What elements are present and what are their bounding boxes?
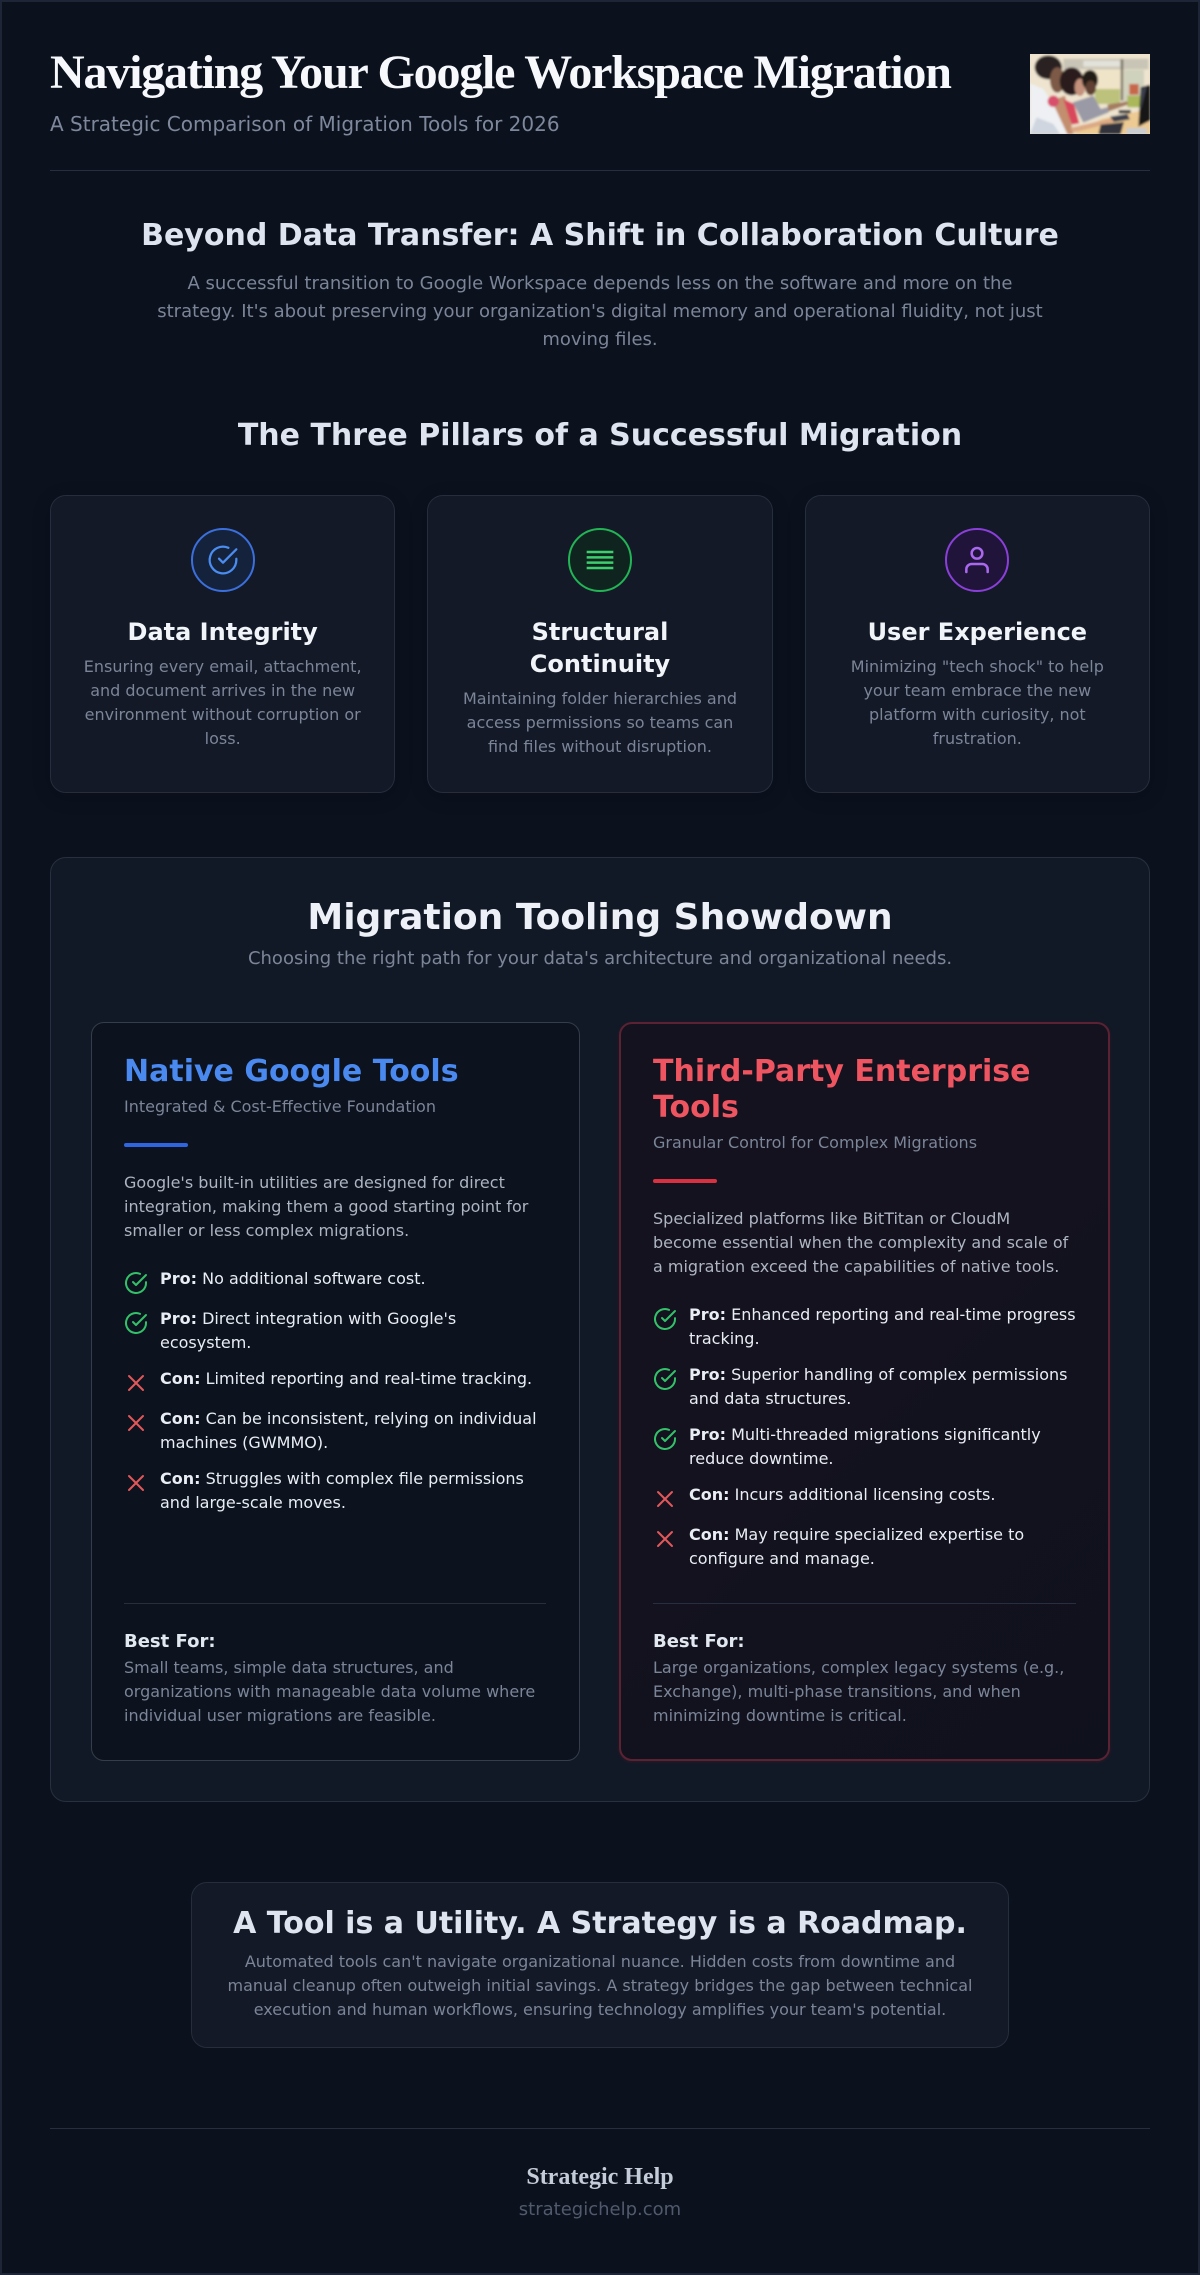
- pro item: ecosystem.: [160, 1333, 251, 1352]
- callout text: manual cleanup often outweigh initial savings. A strategy bridges the gap between technical: [228, 1976, 972, 1995]
- intro text: strategy. It's about preserving your organization's digital memory and operational fluidity, not just: [157, 301, 1043, 322]
- callout text: execution and human workflows, ensuring technology amplifies your team's potential.: [254, 2000, 946, 2019]
- con item: configure and manage.: [689, 1549, 875, 1568]
- divider: [124, 1603, 546, 1604]
- card text: [463, 689, 737, 756]
- pro item: Pro: No additional software cost.: [160, 1269, 426, 1288]
- card heading: Continuity: [530, 650, 670, 678]
- subtitle: A Strategic Comparison of Migration Tools for 2026: [50, 112, 560, 136]
- con item: [128, 1469, 524, 1512]
- best for text: minimizing downtime is critical.: [653, 1706, 907, 1725]
- showdown subtitle: Choosing the right path for your data's architecture and organizational needs.: [248, 948, 952, 969]
- con item: Con: Struggles with complex file permissions: [160, 1469, 524, 1488]
- panel: data integrity: [50, 495, 395, 793]
- card heading: User Experience: [868, 618, 1087, 646]
- card text: and document arrives in the new: [90, 681, 355, 700]
- best for text: Small teams, simple data structures, and: [124, 1658, 454, 1677]
- intro text: [157, 273, 1043, 350]
- card text: find files without disruption.: [488, 737, 712, 756]
- accent bar: [124, 1143, 188, 1147]
- showdown heading: Migration Tooling Showdown: [307, 897, 893, 938]
- card heading: [530, 618, 670, 678]
- column heading: Third-Party Enterprise: [653, 1054, 1030, 1089]
- panel: native google tools: [91, 1022, 580, 1761]
- con item: machines (GWMMO).: [160, 1433, 328, 1452]
- card text: Ensuring every email, attachment,: [84, 657, 362, 676]
- divider: [653, 1603, 1076, 1604]
- icon: check circle: [191, 528, 255, 592]
- pro item: Pro: Multi-threaded migrations significantly: [689, 1425, 1041, 1444]
- pro item: Pro: Superior handling of complex permissions: [689, 1365, 1068, 1384]
- card text: [84, 657, 362, 748]
- pro item: [124, 1269, 426, 1294]
- con item: Con: Can be inconsistent, relying on individual: [160, 1409, 537, 1428]
- con item: Con: Limited reporting and real-time tracking.: [160, 1369, 532, 1388]
- best for text: Exchange), multi-phase transitions, and when: [653, 1682, 1021, 1701]
- footer brand: Strategic Help: [526, 2164, 674, 2190]
- best for text: Large organizations, complex legacy systems (e.g.,: [653, 1658, 1064, 1677]
- con item: Con: Incurs additional licensing costs.: [689, 1485, 995, 1504]
- card text: Minimizing "tech shock" to help: [851, 657, 1104, 676]
- pro item: [124, 1309, 456, 1352]
- panel: user experience: [805, 495, 1150, 793]
- pro item: [654, 1425, 1041, 1468]
- column intro: smaller or less complex migrations.: [124, 1221, 409, 1240]
- column heading: Native Google Tools: [124, 1054, 459, 1089]
- pro item: [654, 1365, 1068, 1408]
- card text: frustration.: [933, 729, 1022, 748]
- con item: Con: May require specialized expertise to: [689, 1525, 1024, 1544]
- icon: user: [945, 528, 1009, 592]
- con item: and large-scale moves.: [160, 1493, 346, 1512]
- footer divider: [50, 2128, 1150, 2129]
- pro item: tracking.: [689, 1329, 760, 1348]
- footer url: strategichelp.com: [519, 2199, 681, 2220]
- best for text: [653, 1658, 1064, 1725]
- column heading: [653, 1054, 1030, 1125]
- accent bar: [653, 1179, 717, 1183]
- column intro: Specialized platforms like BitTitan or CloudM: [653, 1209, 1010, 1228]
- card text: your team embrace the new: [863, 681, 1091, 700]
- pro item: Pro: Direct integration with Google's: [160, 1309, 456, 1328]
- pro item: [654, 1305, 1076, 1348]
- column intro: become essential when the complexity and scale of: [653, 1233, 1068, 1252]
- callout text: [228, 1952, 972, 2019]
- column subtitle: Granular Control for Complex Migrations: [653, 1133, 977, 1152]
- best for text: [124, 1658, 535, 1725]
- pro item: and data structures.: [689, 1389, 851, 1408]
- intro heading: Beyond Data Transfer: A Shift in Collaboration Culture: [141, 218, 1059, 253]
- card heading: Structural: [532, 618, 668, 646]
- column intro: integration, making them a good starting point for: [124, 1197, 528, 1216]
- column intro: a migration exceed the capabilities of native tools.: [653, 1257, 1059, 1276]
- best for text: organizations with manageable data volume where: [124, 1682, 535, 1701]
- callout text: Automated tools can't navigate organizational nuance. Hidden costs from downtime and: [245, 1952, 955, 1971]
- card text: Maintaining folder hierarchies and: [463, 689, 737, 708]
- column intro: Google's built-in utilities are designed for direct: [124, 1173, 505, 1192]
- callout: a tool is a utility: [191, 1882, 1009, 2048]
- card text: [851, 657, 1104, 748]
- pro item: reduce downtime.: [689, 1449, 834, 1468]
- intro text: moving files.: [542, 329, 658, 350]
- best for label: Best For:: [653, 1631, 745, 1652]
- column intro: [124, 1173, 528, 1240]
- icon: lines: [568, 528, 632, 592]
- header photo: [1030, 54, 1150, 134]
- best for label: Best For:: [124, 1631, 216, 1652]
- column heading: Tools: [653, 1090, 739, 1125]
- intro text: A successful transition to Google Workspace depends less on the software and more on the: [187, 273, 1012, 294]
- card text: loss.: [205, 729, 241, 748]
- title: Navigating Your Google Workspace Migration: [50, 46, 951, 99]
- pro item: Pro: Enhanced reporting and real-time progress: [689, 1305, 1076, 1324]
- pillars heading: The Three Pillars of a Successful Migration: [238, 418, 962, 453]
- best for text: individual user migrations are feasible.: [124, 1706, 436, 1725]
- header divider: [50, 170, 1150, 171]
- card text: access permissions so teams can: [467, 713, 733, 732]
- card text: environment without corruption or: [85, 705, 361, 724]
- con item: [657, 1525, 1024, 1568]
- panel: migration tooling showdown: [50, 857, 1150, 1802]
- column subtitle: Integrated & Cost-Effective Foundation: [124, 1097, 436, 1116]
- callout heading: A Tool is a Utility. A Strategy is a Roadmap.: [233, 1906, 967, 1941]
- card heading: Data Integrity: [128, 618, 318, 646]
- panel: third-party enterprise tools: [619, 1022, 1110, 1761]
- column intro: [653, 1209, 1069, 1276]
- card text: platform with curiosity, not: [869, 705, 1086, 724]
- panel: structural continuity: [427, 495, 773, 793]
- con item: [128, 1409, 537, 1452]
